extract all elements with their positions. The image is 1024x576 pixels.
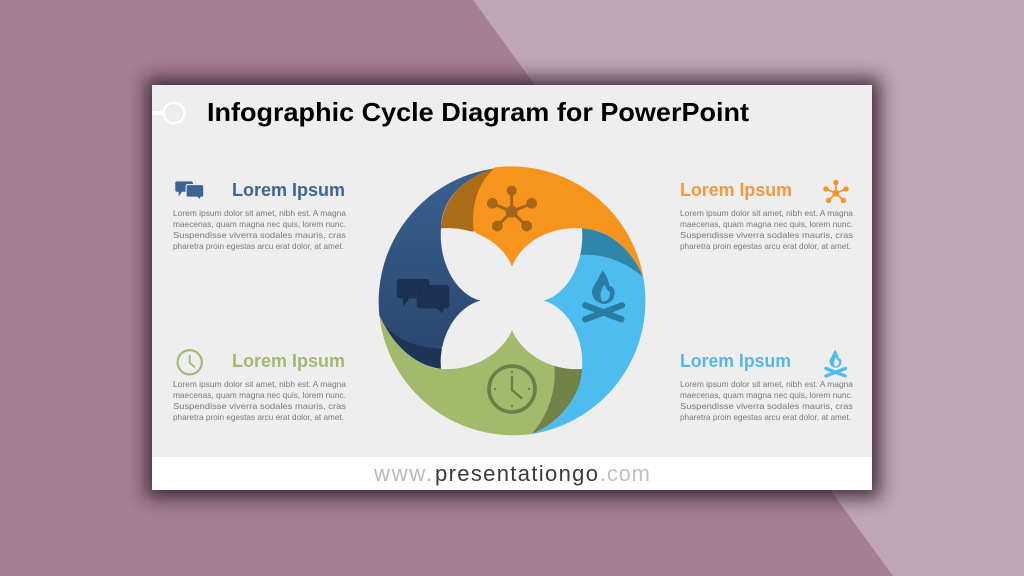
body text: Suspendisse viverra sodales mauris, cras	[173, 401, 346, 411]
icon: campfire small	[826, 350, 845, 376]
footer website text: www.	[373, 461, 432, 486]
body text	[680, 208, 853, 251]
segment: navy	[379, 168, 495, 348]
heading: Lorem Ipsum	[680, 350, 791, 371]
slide panel	[152, 85, 872, 490]
footer website text	[373, 461, 650, 486]
body text: pharetra proin egestas arcu erat dolor, at amet.	[680, 241, 851, 251]
body text: maecenas, quam magna nec quis, lorem nunc.	[680, 390, 853, 400]
icon: campfire	[585, 270, 622, 319]
body text: Lorem ipsum dolor sit amet, nibh est. A magna	[680, 208, 853, 218]
icon: clock	[489, 366, 535, 412]
body text: Lorem ipsum dolor sit amet, nibh est. A magna	[173, 379, 346, 389]
title: Infographic Cycle Diagram for PowerPoint	[207, 97, 749, 127]
segment: navy shade	[379, 315, 443, 369]
segment: teal shade	[580, 228, 643, 277]
segment: orange	[471, 166, 643, 277]
body text: maecenas, quam magna nec quis, lorem nunc.	[173, 390, 346, 400]
footer website text: .com	[600, 461, 650, 486]
slide shadow	[146, 78, 880, 498]
icon: clock small	[178, 350, 202, 374]
segment: green	[379, 315, 555, 435]
body text: pharetra proin egestas arcu erat dolor, at amet.	[173, 241, 344, 251]
segment: light blue	[532, 255, 645, 434]
segment: brown shade	[441, 168, 495, 232]
body text: Lorem ipsum dolor sit amet, nibh est. A magna	[173, 208, 346, 218]
heading: Lorem Ipsum	[232, 179, 345, 200]
icon: network	[487, 186, 537, 231]
body text: maecenas, quam magna nec quis, lorem nunc.	[173, 219, 346, 229]
icon: chat bubbles small	[175, 181, 204, 200]
body text: pharetra proin egestas arcu erat dolor, at amet.	[680, 412, 851, 422]
body text: Suspendisse viverra sodales mauris, cras	[680, 230, 853, 240]
header ring marker	[152, 103, 184, 123]
body text	[680, 379, 853, 422]
icon: chat bubbles	[397, 279, 449, 313]
heading: Lorem Ipsum	[232, 350, 345, 371]
body text: Lorem ipsum dolor sit amet, nibh est. A magna	[680, 379, 853, 389]
body text: Suspendisse viverra sodales mauris, cras	[173, 230, 346, 240]
body text	[173, 208, 346, 251]
body text: pharetra proin egestas arcu erat dolor, at amet.	[173, 412, 344, 422]
body text	[173, 379, 346, 422]
segment: olive shade	[532, 365, 582, 434]
cycle diagram	[379, 166, 645, 435]
panel: bottom-left text block	[173, 350, 346, 422]
body text: maecenas, quam magna nec quis, lorem nunc.	[680, 219, 853, 229]
body text: Suspendisse viverra sodales mauris, cras	[680, 401, 853, 411]
panel: top-left text block	[173, 179, 346, 251]
panel: top-right text block	[680, 179, 853, 251]
footer website text: presentationgo	[435, 461, 598, 486]
center X cutout	[441, 228, 582, 369]
panel: bottom-right text block	[680, 350, 853, 422]
heading: Lorem Ipsum	[680, 179, 792, 200]
icon: network small	[823, 180, 849, 203]
